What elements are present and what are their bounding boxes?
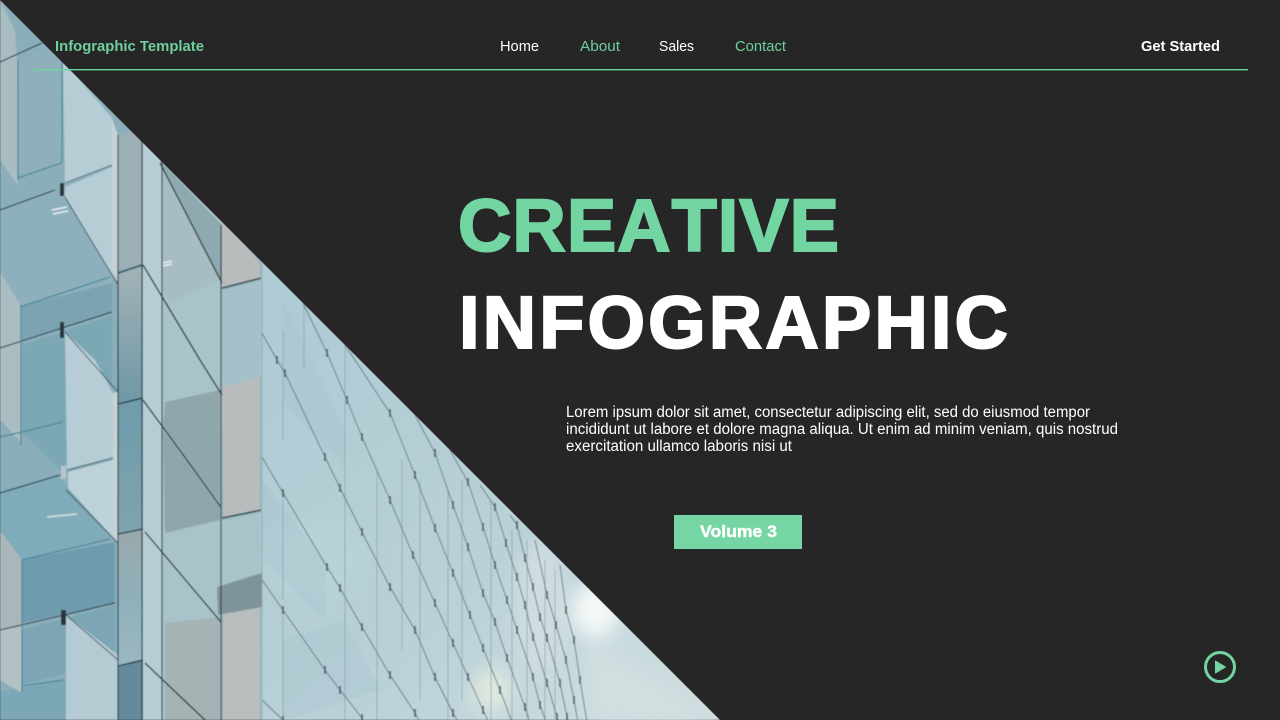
title line: INFOGRAPHIC: INFOGRAPHIC xyxy=(459,281,1008,364)
body paragraph: incididunt ut labore et dolore magna aliqua. Ut enim ad minim veniam, quis nostrud xyxy=(566,421,1118,438)
navigation xyxy=(500,38,787,55)
body paragraph: Lorem ipsum dolor sit amet, consectetur adipiscing elit, sed do eiusmod tempor xyxy=(566,404,1090,421)
badge: Volume 3 xyxy=(674,515,802,549)
nav item: About: About xyxy=(580,38,621,55)
photo: dark column xyxy=(118,128,162,720)
photo: light fin panels xyxy=(0,60,118,720)
call to action: Get Started: Get Started xyxy=(1141,38,1220,55)
photo: clips and glints xyxy=(47,183,172,625)
photo: far glass facade xyxy=(261,230,731,720)
nav item: Home: Home xyxy=(500,38,539,55)
logo text: Infographic Template xyxy=(55,38,204,55)
nav item: Sales: Sales xyxy=(659,38,694,55)
photo: structural lines xyxy=(0,43,261,720)
photo: left pale panels xyxy=(0,1,115,720)
body paragraph: exercitation ullamco laboris nisi ut xyxy=(566,438,793,455)
header rule xyxy=(34,69,1248,70)
nav item: Contact: Contact xyxy=(735,38,787,55)
body paragraph xyxy=(566,404,1118,455)
badge: Volume 3: Volume 3 xyxy=(700,522,777,541)
photo: glass building facade xyxy=(0,0,731,720)
photo: teal mullions xyxy=(0,45,110,693)
title xyxy=(458,184,1008,364)
title line: CREATIVE: CREATIVE xyxy=(458,184,839,267)
photo: mid glass panels xyxy=(160,160,262,720)
icon: play button xyxy=(1206,652,1234,682)
